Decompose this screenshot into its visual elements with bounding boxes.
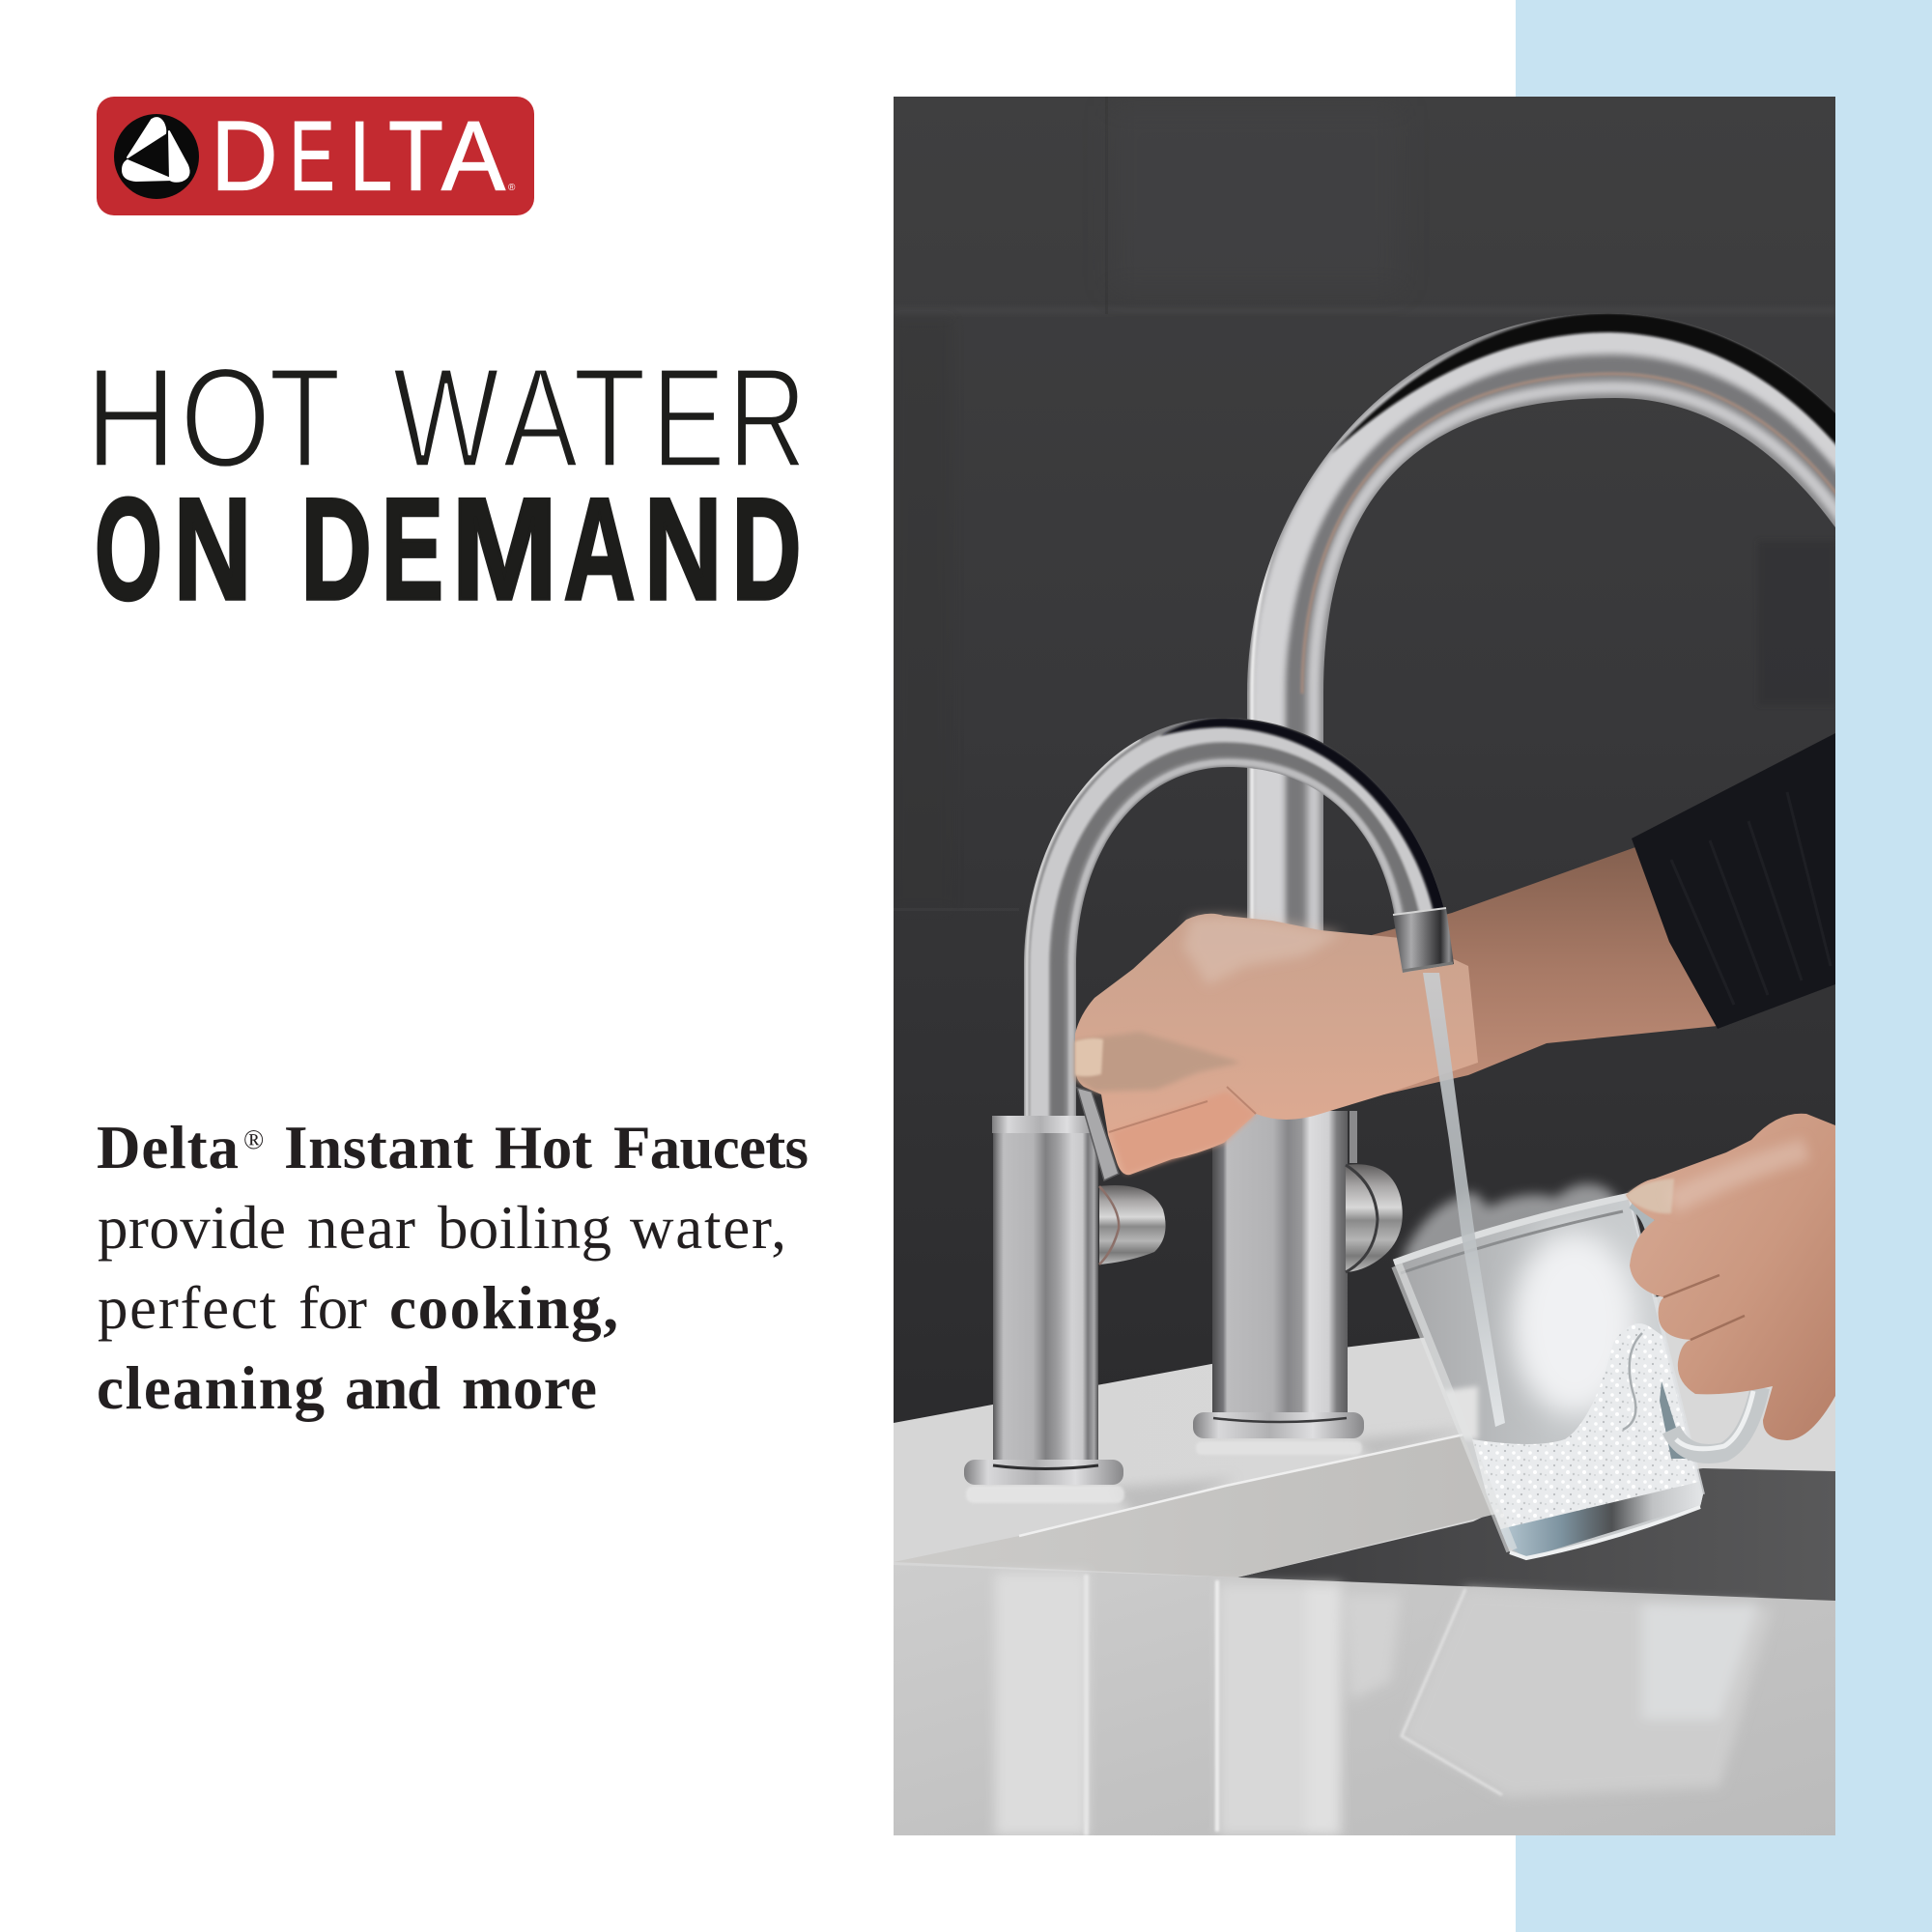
body text	[97, 1114, 809, 1422]
heading line 1: HOT WATER: W	[392, 339, 499, 497]
small faucet body	[993, 1125, 1098, 1465]
small faucet collar	[992, 1116, 1099, 1133]
small faucet lever	[1077, 1088, 1119, 1180]
steam	[1401, 1183, 1623, 1265]
sleeve	[1632, 733, 1835, 1029]
heading line 2: ON DEMAND: E	[382, 468, 443, 630]
small faucet handle knob	[1099, 1185, 1166, 1264]
body text: Hot	[495, 1114, 592, 1181]
body text: more	[462, 1354, 597, 1422]
spout nozzle	[1393, 908, 1454, 973]
heading line 1: HOT WATER: T	[573, 339, 646, 497]
logo background	[97, 97, 534, 215]
heading line 2: ON DEMAND: D	[300, 468, 372, 630]
wall	[894, 97, 1835, 1468]
body text: for	[298, 1274, 367, 1342]
water stream	[1423, 973, 1505, 1427]
logo: Delta badge	[97, 97, 534, 215]
heading line 1: HOT WATER: R	[728, 339, 807, 497]
heading line 2: ON DEMAND	[95, 468, 802, 630]
glass mug	[1394, 1196, 1760, 1558]
deck front edge	[895, 1434, 1494, 1577]
logo wordmark	[211, 100, 516, 211]
countertop reflections	[995, 1573, 1773, 1835]
logo wordmark: D	[211, 100, 278, 211]
body text: and	[345, 1354, 440, 1422]
small faucet	[964, 705, 1459, 1503]
sink basin	[1237, 1468, 1835, 1604]
logo wordmark: E	[290, 100, 334, 211]
mug interior	[1394, 1196, 1703, 1558]
logo wordmark: T	[388, 100, 443, 211]
body text: ®	[243, 1125, 264, 1155]
big faucet spout tube	[1247, 313, 1835, 931]
logo wordmark: ®	[508, 183, 516, 193]
heading line 2: ON DEMAND: N	[644, 468, 723, 630]
body text: Delta	[97, 1114, 239, 1181]
heading line 1: HOT WATER	[85, 339, 807, 497]
logo wordmark: A	[441, 100, 505, 211]
body text: near	[307, 1194, 415, 1262]
mug contents	[1439, 1232, 1710, 1558]
heading line 2: ON DEMAND: A	[564, 468, 636, 630]
big faucet body	[1212, 1111, 1348, 1422]
heading line 1: HOT WATER: E	[651, 339, 725, 497]
heading line 2: ON DEMAND: N	[174, 468, 252, 630]
icon: Delta emblem	[114, 114, 199, 199]
big faucet handle	[1346, 1111, 1403, 1272]
heading line 1: HOT WATER: T	[269, 339, 341, 497]
body text: cleaning	[97, 1354, 325, 1422]
small faucet spout tube	[1024, 718, 1443, 1116]
body text: boiling	[438, 1194, 611, 1262]
heading line 1: HOT WATER: A	[502, 339, 578, 497]
big faucet flange	[1193, 1412, 1364, 1455]
heading line 1: HOT WATER: H	[85, 339, 177, 497]
left hand	[1075, 914, 1478, 1175]
heading line 1: HOT WATER: O	[180, 339, 270, 497]
heading	[85, 339, 807, 630]
body text: Instant	[284, 1114, 473, 1181]
deck shadows	[1121, 1430, 1453, 1509]
right hand	[1626, 1114, 1835, 1440]
body text: provide	[98, 1194, 286, 1262]
heading line 2: ON DEMAND: D	[732, 468, 802, 630]
body text: cooking,	[389, 1274, 618, 1342]
countertop deck	[894, 1296, 1835, 1577]
logo wordmark: L	[350, 100, 392, 211]
body text: water,	[630, 1194, 786, 1262]
heading line 2: ON DEMAND: M	[451, 468, 557, 630]
mug rim and walls	[1394, 1196, 1703, 1558]
small faucet flange	[964, 1460, 1124, 1503]
accent panel: light blue stripe	[1516, 0, 1932, 1932]
body text: Faucets	[613, 1114, 809, 1181]
body text: perfect	[98, 1274, 276, 1342]
heading line 2: ON DEMAND: O	[95, 468, 162, 630]
left arm	[1372, 847, 1718, 1094]
photo: faucets, hands and mug	[894, 97, 1874, 1835]
mug handle	[1633, 1203, 1760, 1454]
front countertop	[894, 1565, 1835, 1835]
big faucet	[1193, 290, 1874, 1455]
